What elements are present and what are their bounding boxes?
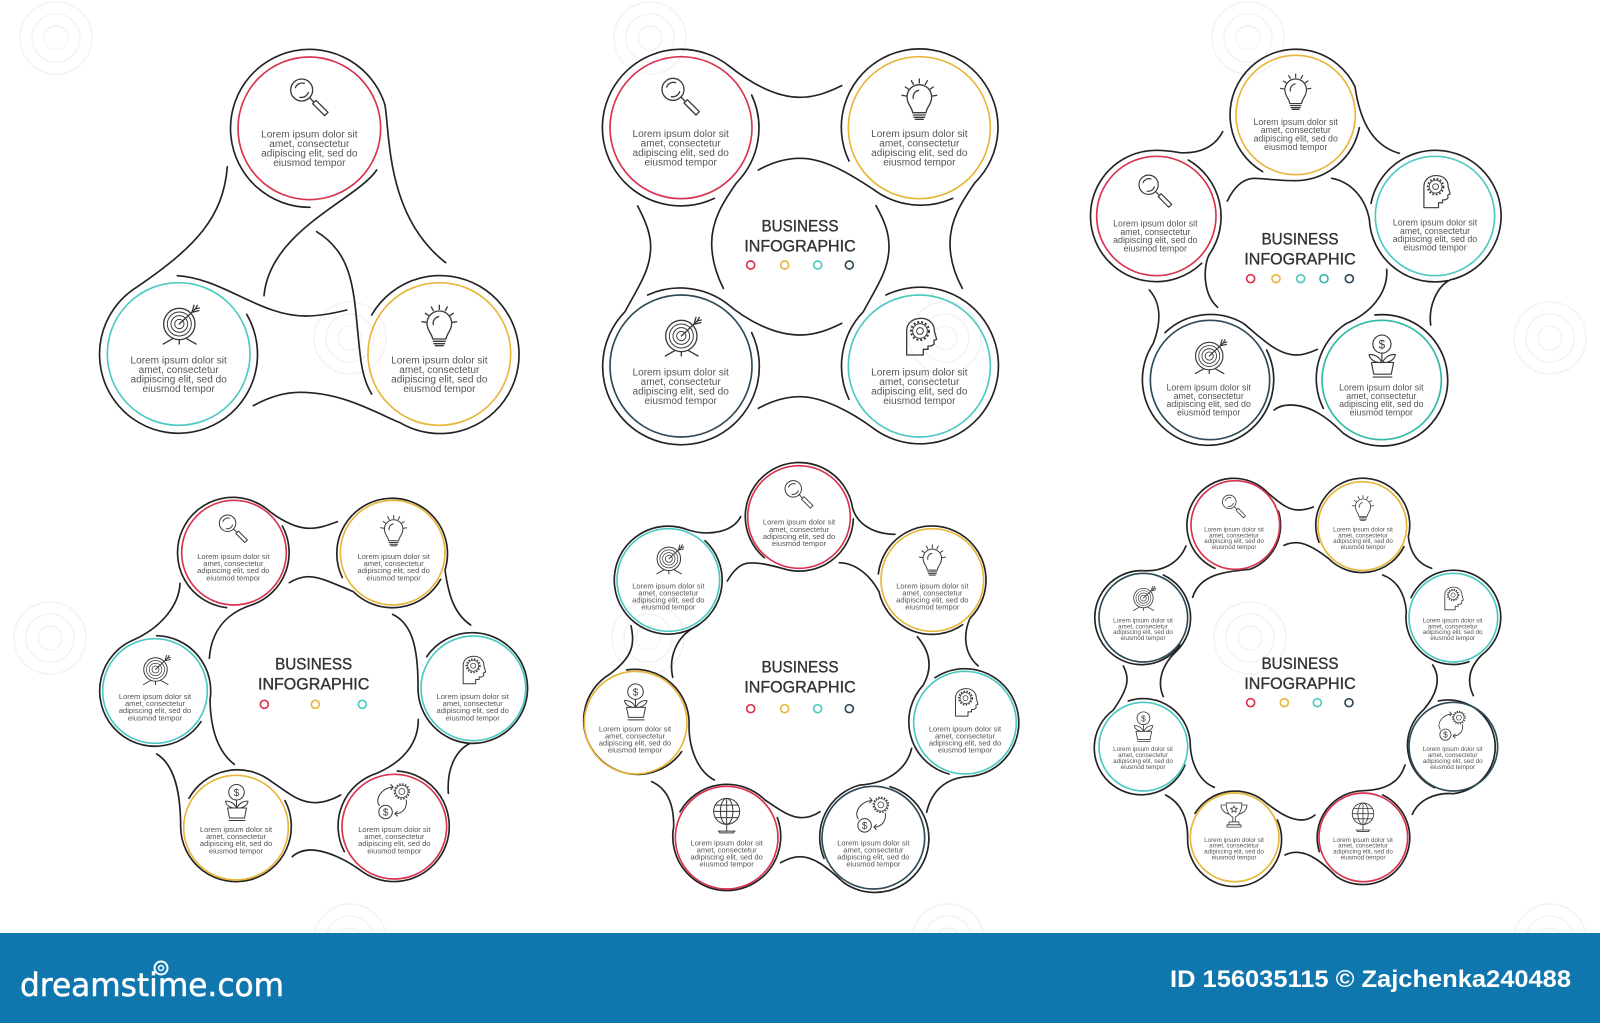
step: target: Lorem ipsum dolor sit (632, 581, 705, 590)
connector lines (1090, 49, 1501, 446)
step: globe: adipiscing elit, sed do (1333, 849, 1393, 856)
step: search (182, 500, 286, 605)
step: globe: amet, consectetur (1338, 843, 1388, 850)
step: mind: eiusmod tempor (1430, 635, 1475, 642)
legend dots (747, 261, 853, 269)
step: growth (184, 775, 288, 880)
step: target: adipiscing elit, sed do (1166, 399, 1251, 409)
step: exchange (342, 774, 447, 879)
step: growth: eiusmod tempor (1121, 764, 1165, 771)
step: search: amet, consectetur (1209, 532, 1259, 539)
step: target (1150, 320, 1270, 440)
step: mind: Lorem ipsum dolor sit (929, 724, 1002, 733)
title (258, 654, 369, 693)
step: idea: adipiscing elit, sed do (358, 566, 430, 575)
step: search (610, 57, 752, 199)
step: mind: adipiscing elit, sed do (1393, 234, 1477, 244)
step: mind (848, 295, 990, 437)
step: search: Lorem ipsum dolor sit (1204, 526, 1264, 533)
step: search: amet, consectetur (203, 559, 264, 568)
step: mind (1375, 156, 1495, 276)
logo wordmark: dreamstime.com (20, 966, 284, 1004)
step: mind: eiusmod tempor (1403, 242, 1467, 252)
step: idea: eiusmod tempor (1341, 544, 1385, 551)
image id and credit: ID 156035115 © Zajchenka240488 (1170, 966, 1571, 993)
footer bar (0, 933, 1600, 1023)
step: exchange: eiusmod tempor (846, 860, 901, 869)
connector lines (100, 497, 528, 882)
step: idea (1236, 55, 1355, 175)
title: BUSINESS (761, 216, 838, 235)
step: trophy: eiusmod tempor (1212, 854, 1256, 861)
step: idea (1318, 482, 1407, 570)
step: target: eiusmod tempor (641, 603, 696, 612)
step: idea: Lorem ipsum dolor sit (1333, 526, 1393, 533)
title: INFOGRAPHIC (1244, 674, 1356, 693)
step: search (1097, 156, 1216, 276)
step: target: adipiscing elit, sed do (1113, 629, 1173, 636)
step: target: eiusmod tempor (128, 713, 183, 722)
step: idea: amet, consectetur (399, 365, 480, 376)
legend dots (1247, 699, 1353, 707)
step: target (103, 639, 207, 743)
step: search: Lorem ipsum dolor sit (197, 552, 270, 561)
step: growth: Lorem ipsum dolor sit (1113, 746, 1173, 753)
step: search: eiusmod tempor (1124, 243, 1187, 253)
step: idea: adipiscing elit, sed do (391, 374, 488, 385)
diagram: six steps (100, 497, 528, 882)
step: search: adipiscing elit, sed do (1204, 538, 1264, 545)
step: trophy (1190, 793, 1279, 882)
step: globe: adipiscing elit, sed do (691, 853, 763, 862)
step: mind (1409, 573, 1498, 662)
step: exchange: Lorem ipsum dolor sit (1423, 746, 1483, 753)
step: target: amet, consectetur (1118, 623, 1168, 630)
title (1244, 654, 1356, 693)
step: idea: adipiscing elit, sed do (1253, 133, 1338, 143)
step: search (1191, 481, 1280, 569)
step: trophy: amet, consectetur (1209, 843, 1259, 850)
step: mind: adipiscing elit, sed do (929, 739, 1001, 748)
legend dots (747, 705, 853, 713)
step: growth: amet, consectetur (1118, 752, 1168, 759)
step: search: Lorem ipsum dolor sit (261, 130, 358, 141)
step: growth: amet, consectetur (1346, 391, 1416, 401)
step: search: Lorem ipsum dolor sit (632, 129, 729, 140)
step: exchange: amet, consectetur (843, 845, 904, 854)
step: target: Lorem ipsum dolor sit (1113, 617, 1173, 624)
diagram: three steps (100, 49, 519, 434)
step: search: eiusmod tempor (1212, 544, 1256, 551)
step: search: amet, consectetur (769, 525, 830, 534)
step: mind: amet, consectetur (1428, 623, 1478, 630)
step: exchange: Lorem ipsum dolor sit (358, 825, 431, 834)
step: idea: adipiscing elit, sed do (896, 596, 968, 605)
step: idea (368, 283, 511, 425)
step: growth: Lorem ipsum dolor sit (1339, 383, 1424, 393)
step: growth: adipiscing elit, sed do (1113, 758, 1173, 765)
connector lines (602, 49, 998, 445)
step: search: eiusmod tempor (645, 157, 717, 168)
step: exchange: amet, consectetur (364, 832, 425, 841)
step: idea: amet, consectetur (364, 559, 424, 568)
step: exchange (822, 786, 925, 889)
step: search: eiusmod tempor (772, 539, 827, 548)
step: target: Lorem ipsum dolor sit (130, 355, 227, 366)
title (744, 658, 856, 697)
title (1244, 229, 1356, 268)
step: search: adipiscing elit, sed do (261, 149, 358, 160)
step: target: amet, consectetur (139, 365, 219, 376)
step: exchange: adipiscing elit, sed do (358, 839, 430, 848)
step: search: adipiscing elit, sed do (763, 532, 835, 541)
title: BUSINESS (1261, 654, 1338, 673)
step: mind: eiusmod tempor (883, 396, 956, 407)
step: mind: adipiscing elit, sed do (871, 386, 968, 397)
step: mind: eiusmod tempor (446, 713, 500, 722)
step: search: amet, consectetur (269, 139, 350, 150)
step: idea: Lorem ipsum dolor sit (358, 552, 431, 561)
step: target: amet, consectetur (641, 377, 721, 388)
step: mind: amet, consectetur (879, 377, 960, 388)
step: globe: eiusmod tempor (700, 860, 754, 869)
title: INFOGRAPHIC (258, 674, 369, 693)
step: exchange: eiusmod tempor (1430, 764, 1475, 771)
step: growth (1099, 702, 1188, 791)
step: target: amet, consectetur (1174, 391, 1244, 401)
step: idea: eiusmod tempor (403, 384, 476, 395)
step: idea: adipiscing elit, sed do (871, 148, 968, 159)
title: INFOGRAPHIC (744, 236, 856, 255)
step: mind: Lorem ipsum dolor sit (1423, 617, 1483, 624)
step: idea: Lorem ipsum dolor sit (896, 581, 969, 590)
step: idea (340, 500, 445, 605)
step: target: amet, consectetur (125, 699, 186, 708)
step: target: amet, consectetur (638, 588, 699, 597)
step: trophy: Lorem ipsum dolor sit (1204, 837, 1264, 844)
step: idea: eiusmod tempor (367, 573, 421, 582)
step: growth (584, 671, 687, 774)
legend dots (260, 700, 366, 708)
step: idea: amet, consectetur (902, 588, 963, 597)
step: mind: amet, consectetur (443, 699, 503, 708)
step: exchange: amet, consectetur (1428, 752, 1478, 759)
step: trophy: adipiscing elit, sed do (1204, 849, 1264, 856)
step: search: adipiscing elit, sed do (1113, 235, 1198, 245)
step: search: adipiscing elit, sed do (197, 566, 269, 575)
step: idea: amet, consectetur (1261, 125, 1331, 135)
step: target (107, 283, 250, 425)
step: search: eiusmod tempor (206, 573, 261, 582)
step: growth: Lorem ipsum dolor sit (599, 724, 672, 733)
step: mind: Lorem ipsum dolor sit (437, 692, 510, 701)
step: search: adipiscing elit, sed do (632, 148, 729, 159)
step: idea: amet, consectetur (1338, 532, 1388, 539)
step: globe (1319, 793, 1408, 882)
title: BUSINESS (275, 654, 352, 673)
step: target: adipiscing elit, sed do (632, 596, 704, 605)
step: growth: Lorem ipsum dolor sit (200, 825, 273, 834)
step: search: Lorem ipsum dolor sit (763, 518, 836, 527)
step: growth: adipiscing elit, sed do (1339, 399, 1424, 409)
step: exchange: eiusmod tempor (367, 846, 422, 855)
step: target: adipiscing elit, sed do (119, 706, 191, 715)
step: globe: Lorem ipsum dolor sit (1333, 837, 1393, 844)
step: search (238, 57, 381, 200)
step: exchange (1409, 702, 1498, 791)
step: exchange: Lorem ipsum dolor sit (837, 838, 910, 847)
step: target (610, 295, 752, 437)
step: idea: eiusmod tempor (905, 603, 960, 612)
step: search (748, 466, 850, 568)
step: mind (914, 671, 1016, 774)
step: exchange: adipiscing elit, sed do (1423, 758, 1483, 765)
step: idea: Lorem ipsum dolor sit (1253, 117, 1338, 127)
step: target: Lorem ipsum dolor sit (119, 692, 192, 701)
step: search: amet, consectetur (1120, 227, 1190, 237)
step: growth: eiusmod tempor (1350, 407, 1413, 417)
step: idea: eiusmod tempor (1264, 142, 1327, 152)
title: BUSINESS (761, 658, 838, 677)
connector lines (100, 49, 519, 434)
step: idea: adipiscing elit, sed do (1333, 538, 1393, 545)
step: growth: amet, consectetur (605, 731, 666, 740)
title: INFOGRAPHIC (744, 678, 856, 697)
step: target (617, 529, 720, 631)
step: target: eiusmod tempor (1121, 635, 1165, 642)
title (744, 216, 856, 255)
step: growth: adipiscing elit, sed do (599, 739, 671, 748)
step: globe: Lorem ipsum dolor sit (691, 838, 764, 847)
step: search: Lorem ipsum dolor sit (1113, 219, 1198, 229)
step: target: Lorem ipsum dolor sit (632, 367, 729, 378)
step: globe: amet, consectetur (697, 845, 757, 854)
diagram: eight steps (1094, 478, 1501, 887)
connector lines (584, 463, 1019, 893)
step: idea: Lorem ipsum dolor sit (871, 129, 968, 140)
step: mind (421, 636, 526, 741)
step: exchange: adipiscing elit, sed do (837, 853, 909, 862)
step: mind: Lorem ipsum dolor sit (871, 367, 968, 378)
step: idea: eiusmod tempor (883, 157, 956, 168)
step: target: Lorem ipsum dolor sit (1166, 383, 1251, 393)
step: mind: amet, consectetur (1400, 226, 1470, 236)
step: globe (675, 786, 778, 889)
step: mind: eiusmod tempor (938, 746, 993, 755)
step: growth (1322, 320, 1441, 440)
step: mind: adipiscing elit, sed do (1423, 629, 1483, 636)
title: BUSINESS (1261, 229, 1338, 248)
step: idea (881, 529, 984, 631)
diagram: seven steps (584, 463, 1019, 893)
step: target: adipiscing elit, sed do (130, 374, 227, 385)
legend dots (1247, 275, 1353, 283)
step: target: adipiscing elit, sed do (632, 386, 729, 397)
step: idea: amet, consectetur (879, 138, 960, 149)
step: growth: eiusmod tempor (209, 846, 264, 855)
diagram: four steps (602, 49, 998, 445)
step: growth: eiusmod tempor (608, 746, 663, 755)
step: mind: adipiscing elit, sed do (437, 706, 509, 715)
title: INFOGRAPHIC (1244, 249, 1356, 268)
step: idea (848, 57, 990, 199)
step: target: eiusmod tempor (143, 384, 215, 395)
connector lines (1094, 478, 1501, 887)
step: idea: Lorem ipsum dolor sit (391, 355, 488, 366)
step: target: eiusmod tempor (1177, 407, 1240, 417)
step: mind: amet, consectetur (935, 731, 996, 740)
step: target (1099, 573, 1188, 662)
step: mind: Lorem ipsum dolor sit (1393, 218, 1478, 228)
step: growth: amet, consectetur (206, 832, 267, 841)
step: search: amet, consectetur (641, 138, 721, 149)
step: globe: eiusmod tempor (1341, 854, 1385, 861)
step: target: eiusmod tempor (645, 396, 717, 407)
step: growth: adipiscing elit, sed do (200, 839, 272, 848)
step: search: eiusmod tempor (273, 158, 346, 169)
diagram: five steps (1090, 49, 1501, 446)
